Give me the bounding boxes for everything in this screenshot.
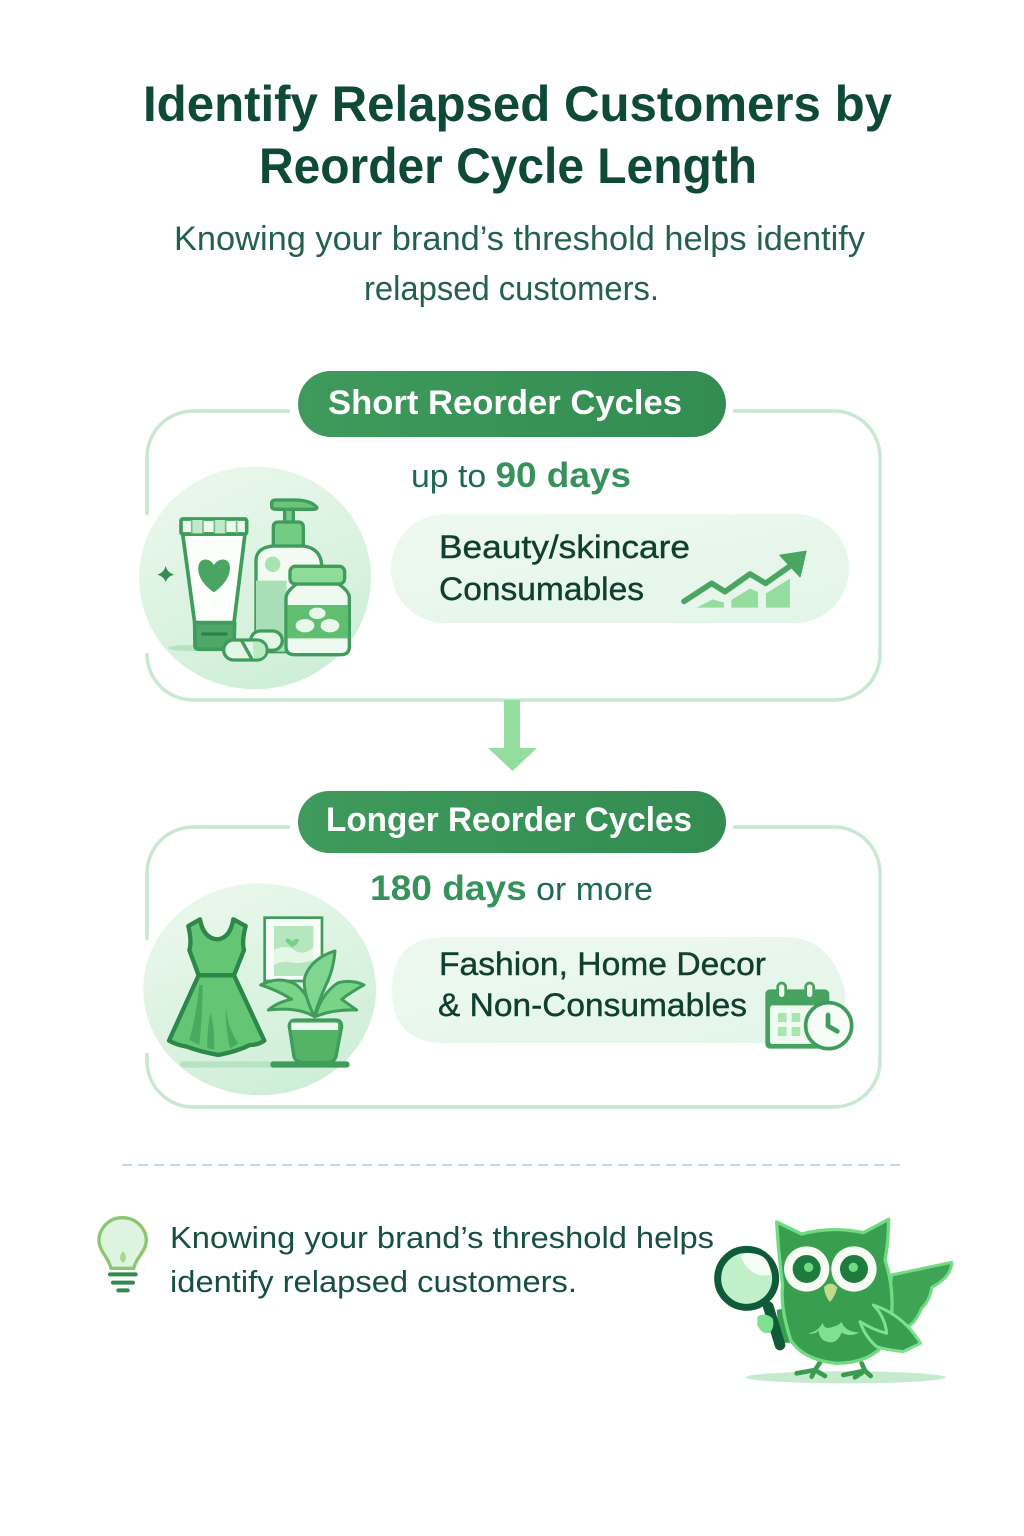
subtitle: relapsed customers. [364, 270, 659, 308]
category pill: fashion and home decor: & Non-Consumables [438, 987, 747, 1023]
icon: rising trend chart [684, 551, 806, 608]
heading pill: short: Short Reorder Cycles [328, 384, 682, 422]
pump bottle [256, 500, 322, 652]
icon: calendar and clock [765, 983, 852, 1049]
category pill: fashion and home decor: Fashion, Home Decor [439, 946, 766, 982]
illustration: dress, picture and plant [143, 883, 376, 1095]
picture frame [265, 918, 322, 981]
duration: 180 days or more: 180 days or more [370, 869, 653, 908]
dress [169, 919, 264, 1055]
capsules [224, 631, 282, 660]
plant [261, 951, 364, 1017]
divider [122, 1164, 900, 1166]
title: Reorder Cycle Length [259, 138, 757, 194]
takeaway text: identify relapsed customers. [170, 1264, 577, 1299]
category pill: beauty and consumables: Beauty/skincare [439, 529, 690, 565]
title: Identify Relapsed Customers by [143, 76, 892, 132]
illustration: owl with magnifying glass [718, 1219, 952, 1383]
jar [286, 566, 349, 655]
category pill: fashion and home decor [392, 937, 845, 1043]
heading pill: short [298, 371, 726, 437]
illustration: skincare products [139, 467, 371, 689]
subtitle [174, 220, 865, 308]
heading pill: longer: Longer Reorder Cycles [326, 801, 692, 839]
takeaway text: Knowing your brand’s threshold helps [170, 1220, 714, 1255]
panel: short reorder cycles [139, 371, 880, 700]
arrow: short to longer [488, 700, 537, 771]
tube [181, 519, 247, 649]
duration: up to 90 days: up to 90 days [411, 456, 631, 495]
icon: light bulb [99, 1218, 146, 1290]
title [143, 76, 892, 194]
category pill: beauty and consumables: Consumables [439, 571, 644, 607]
panel: longer reorder cycles [140, 791, 880, 1107]
subtitle: Knowing your brand’s threshold helps identify [174, 220, 865, 258]
heading pill: longer [298, 791, 726, 853]
takeaway text [170, 1220, 714, 1299]
category pill: beauty and consumables [391, 514, 849, 623]
